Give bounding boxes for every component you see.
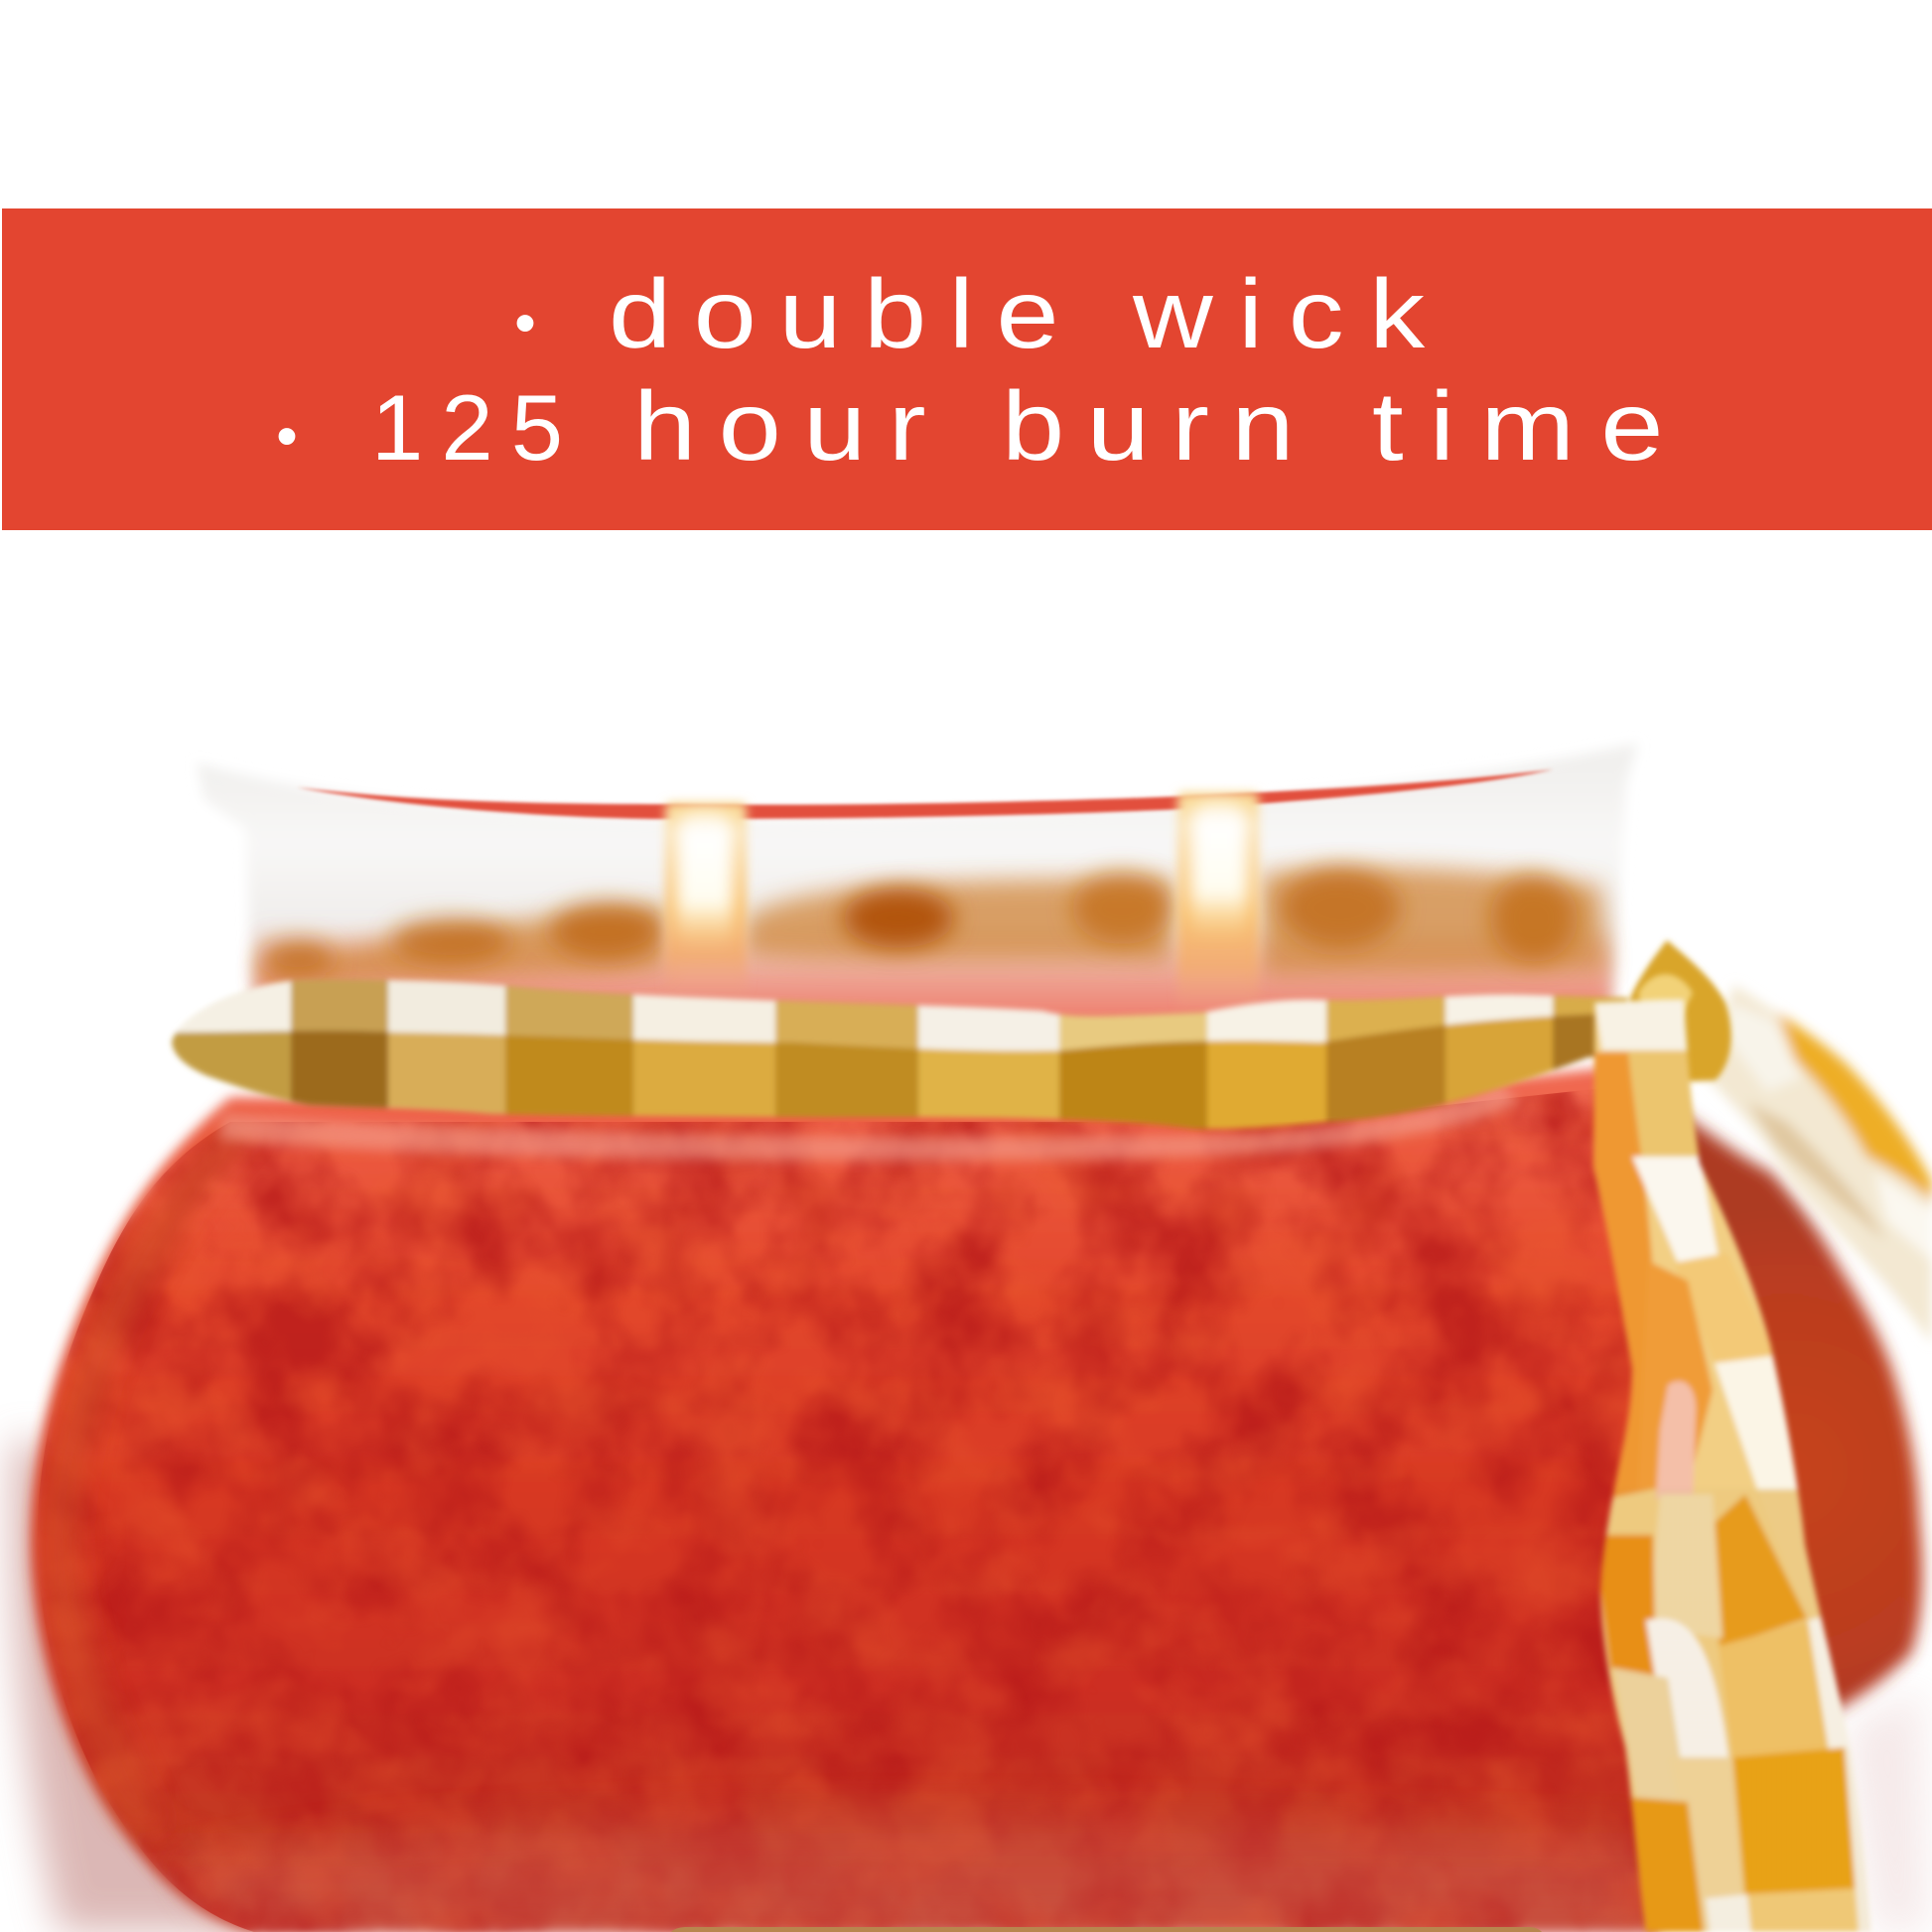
lower row checks (168, 1011, 1598, 1132)
candle photo (0, 743, 1932, 1932)
melted wax seen through glass (256, 868, 1610, 1042)
tail pale square lower (1719, 1620, 1829, 1757)
tail orange flap left (1590, 1050, 1655, 1499)
feature line: 125 hour burn time: • (276, 402, 298, 471)
tail white square top (1594, 1000, 1688, 1052)
white core (1191, 802, 1247, 941)
tail woven texture (1579, 1489, 1886, 1932)
tail orange bottom left (1628, 1797, 1704, 1932)
red rim line of glass (297, 769, 1553, 819)
back tail yellow outer strip (1777, 1013, 1932, 1201)
tail pale square third (1674, 1253, 1777, 1362)
feature line: double wick: • (514, 289, 536, 357)
white core (677, 812, 733, 951)
feature line: double wick: double (609, 260, 1059, 368)
left orange edge (38, 1122, 258, 1827)
tail pale square upper (1602, 1050, 1704, 1157)
tail white edge bottom right (1845, 1747, 1878, 1932)
feature line: 125 hour burn time: time (1372, 372, 1663, 481)
back tail white stripe (1723, 1003, 1802, 1092)
feature line: 125 hour burn time: hour (633, 372, 926, 481)
banner background (2, 208, 1932, 530)
feature line: 125 hour burn time (276, 372, 1663, 481)
tail orange left lower (1593, 1535, 1656, 1676)
candle back shadow band on right side (1628, 1082, 1922, 1727)
tail white bottom (1706, 1894, 1751, 1932)
front hanging ribbon tail (1579, 993, 1886, 1932)
caramel darker blotches (262, 869, 1578, 976)
lighter lower wax fade (179, 1814, 1648, 1932)
knot body (1628, 940, 1731, 1082)
glass haze around lower jar (11, 1440, 1926, 1932)
ribbon knot (1628, 940, 1731, 1082)
glass jar upper wall (197, 743, 1638, 1003)
feature line: 125 hour burn time: burn (1002, 372, 1295, 481)
candle wax body (0, 1062, 1688, 1932)
mottled wax texture (0, 1082, 1688, 1932)
tail pale bottom right (1747, 1888, 1876, 1932)
back tail lower white square (1874, 1172, 1932, 1261)
glass lip highlight below ribbon (218, 1082, 1519, 1161)
feature line: 125 hour burn time: 125 (371, 375, 563, 480)
feature line: double wick (514, 260, 1426, 368)
tail white square second (1632, 1157, 1720, 1263)
back ribbon tail (1701, 985, 1932, 1343)
outer glow (1177, 792, 1259, 1011)
tail pink highlight (1656, 1381, 1696, 1499)
body shape (32, 1062, 1658, 1932)
tail pale lattice right (1757, 1489, 1822, 1618)
flame left (665, 802, 747, 996)
banner: features (2, 208, 1932, 530)
caramel hazy bands (260, 868, 1608, 985)
wax pool colour (256, 923, 1610, 1042)
tail pale lattice left (1648, 1494, 1723, 1638)
tail orange square middle (1708, 1494, 1807, 1648)
tail base (1590, 1005, 1815, 1911)
upper row checks (173, 976, 1628, 1056)
tail white square lower left (1646, 1618, 1728, 1757)
ribbon around jar neck (168, 976, 1630, 1132)
tail orange fold (1649, 1262, 1715, 1490)
knot highlight (1638, 974, 1693, 1023)
tail pale lattice bottom left (1613, 1668, 1688, 1807)
tail pale lattice bottom (1668, 1757, 1745, 1932)
tail orange square bottom (1732, 1747, 1859, 1898)
back tail base (1701, 985, 1932, 1343)
outer glow (665, 802, 747, 996)
feature line: double wick: wick (1132, 260, 1426, 368)
tail white square fourth (1715, 1355, 1802, 1489)
flame right (1177, 792, 1259, 1011)
tail white stripe right (1808, 1613, 1866, 1751)
back tail beige fold (1747, 1102, 1886, 1241)
label top edge (671, 1927, 1542, 1932)
